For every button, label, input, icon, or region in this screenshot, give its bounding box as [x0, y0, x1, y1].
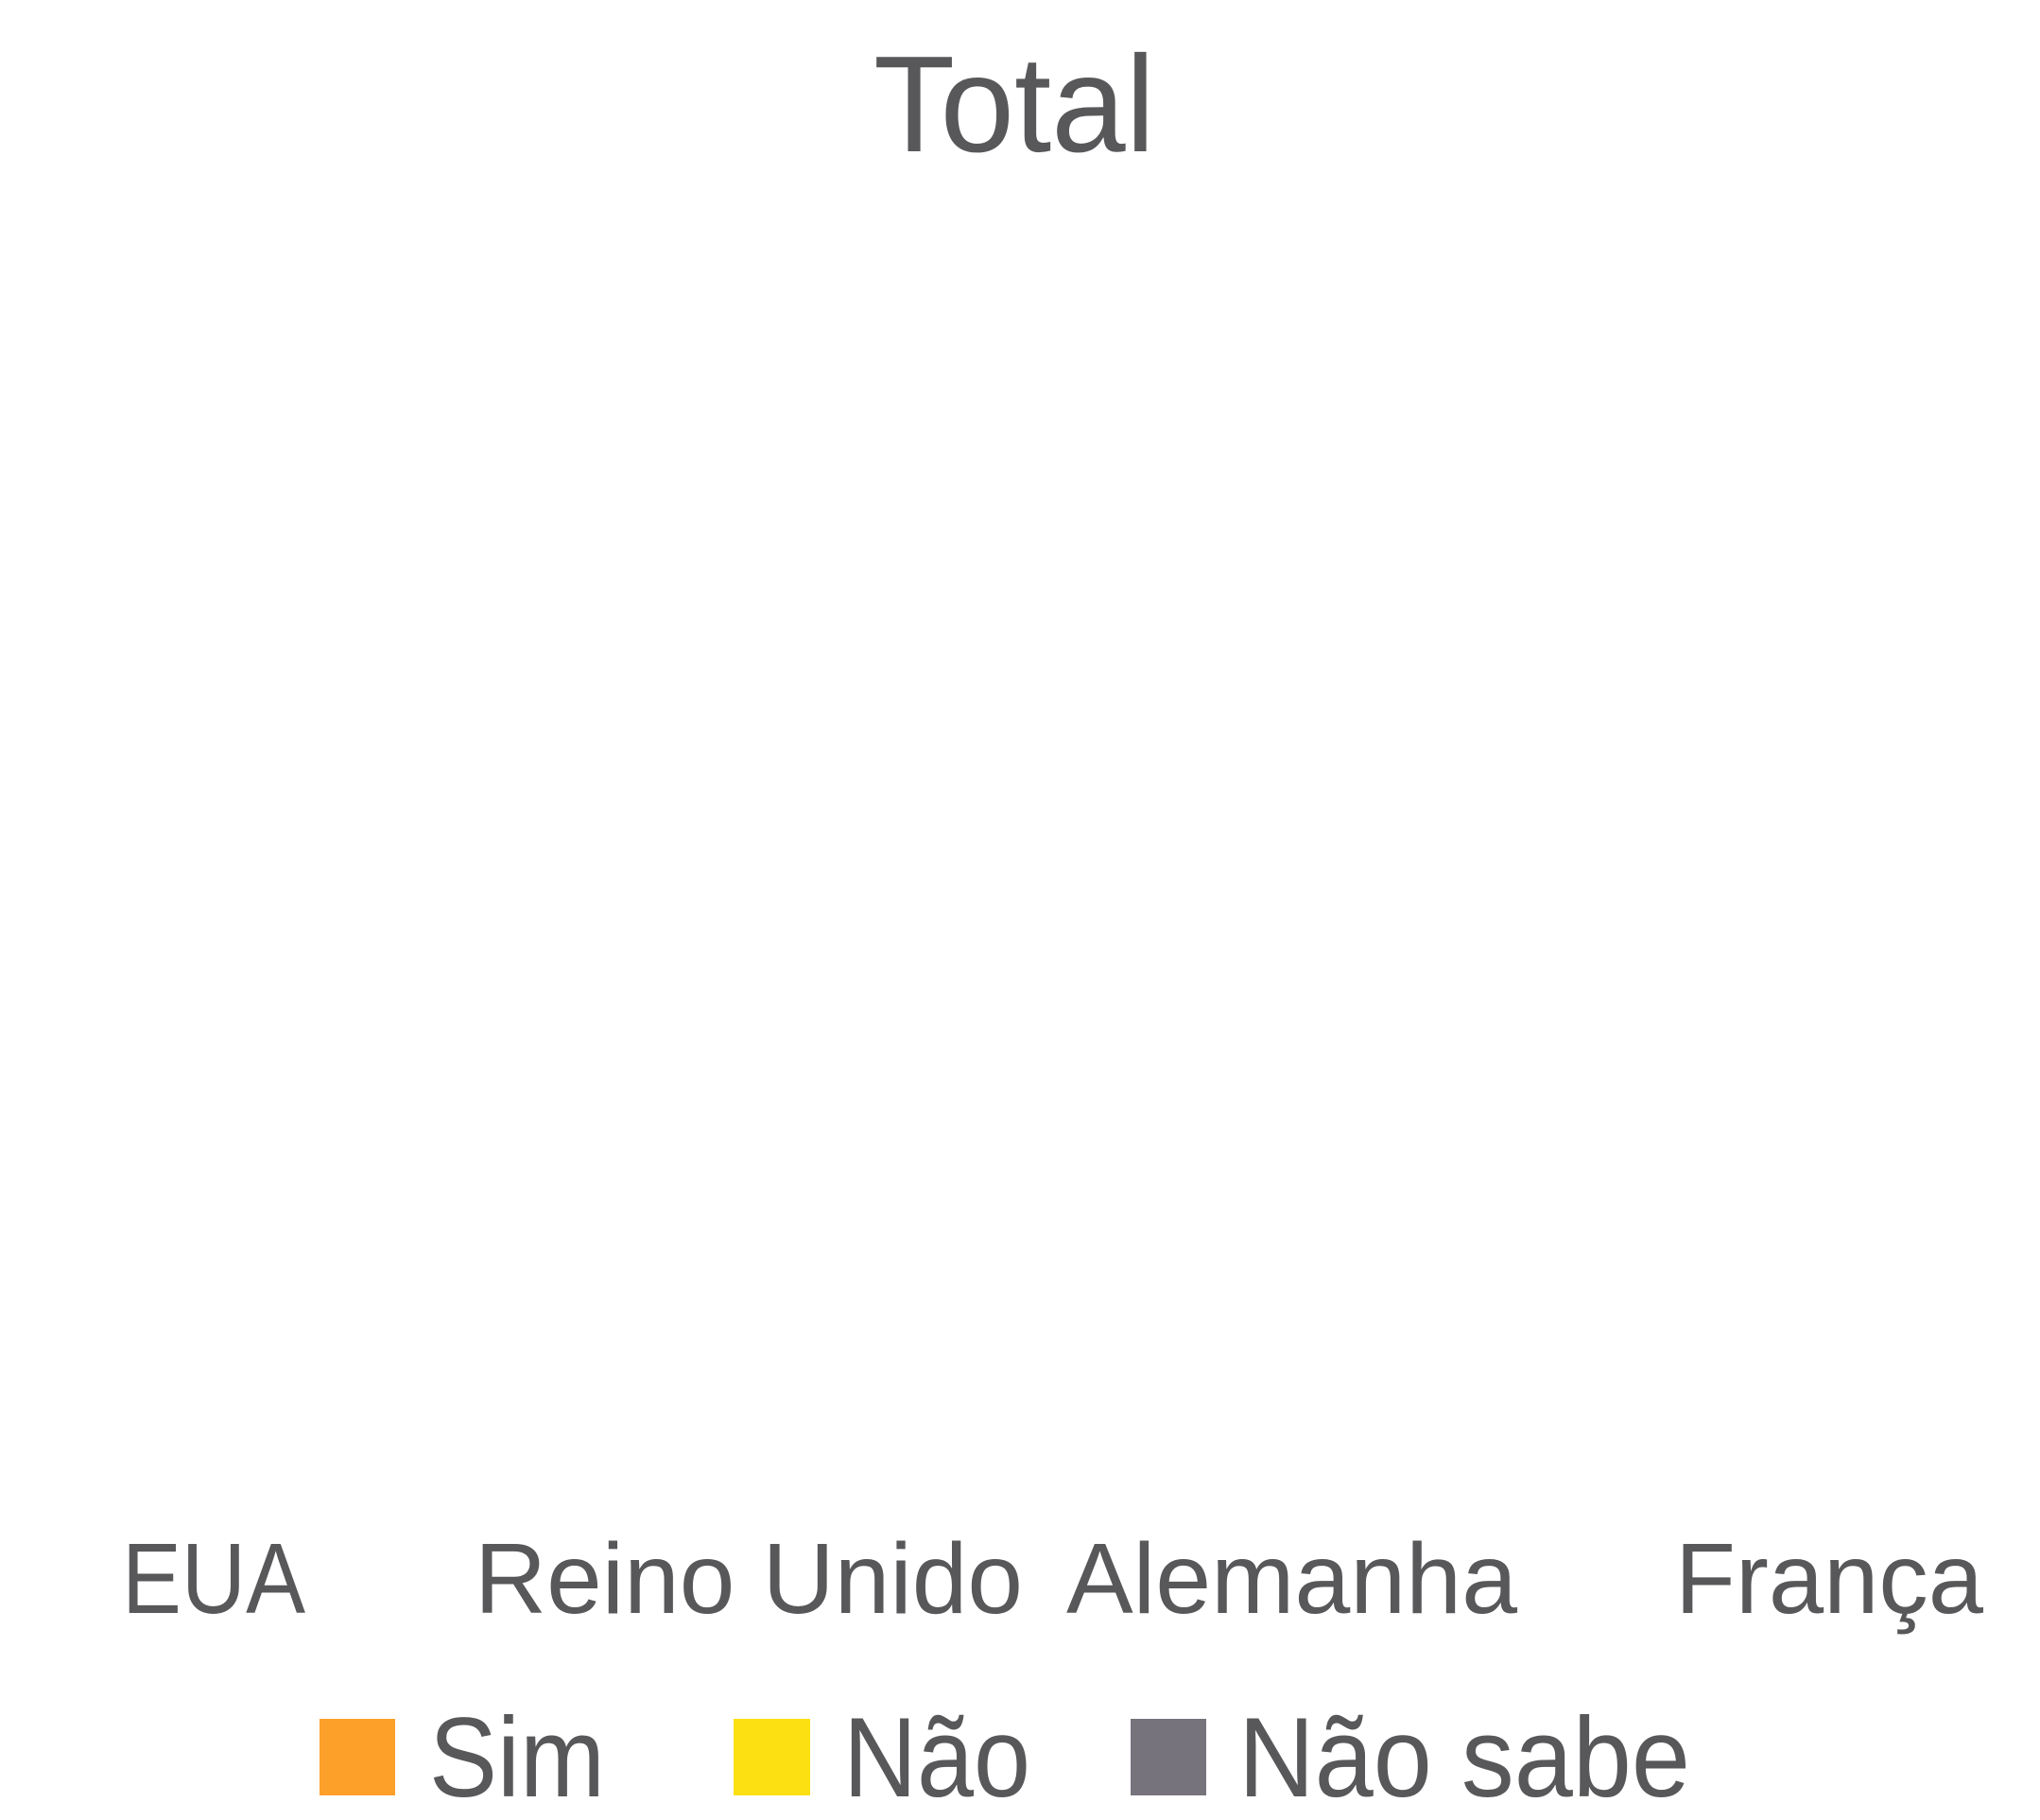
title: Total: [873, 27, 1155, 181]
label: EUA: EUA: [122, 1523, 305, 1635]
legend: [320, 1694, 1690, 1820]
label: Reino Unido: Reino Unido: [475, 1523, 1023, 1635]
category axis labels: [122, 1523, 1983, 1635]
label: Alemanha: Alemanha: [1066, 1523, 1517, 1635]
legend item: Não: [734, 1694, 1030, 1820]
legend item: Não sabe: Não sabe: [1238, 1694, 1690, 1820]
label: França: França: [1675, 1523, 1983, 1635]
legend item: Sim: Sim: [429, 1694, 605, 1820]
legend item: Sim: [320, 1694, 605, 1820]
legend item: Não: Não: [843, 1694, 1030, 1820]
